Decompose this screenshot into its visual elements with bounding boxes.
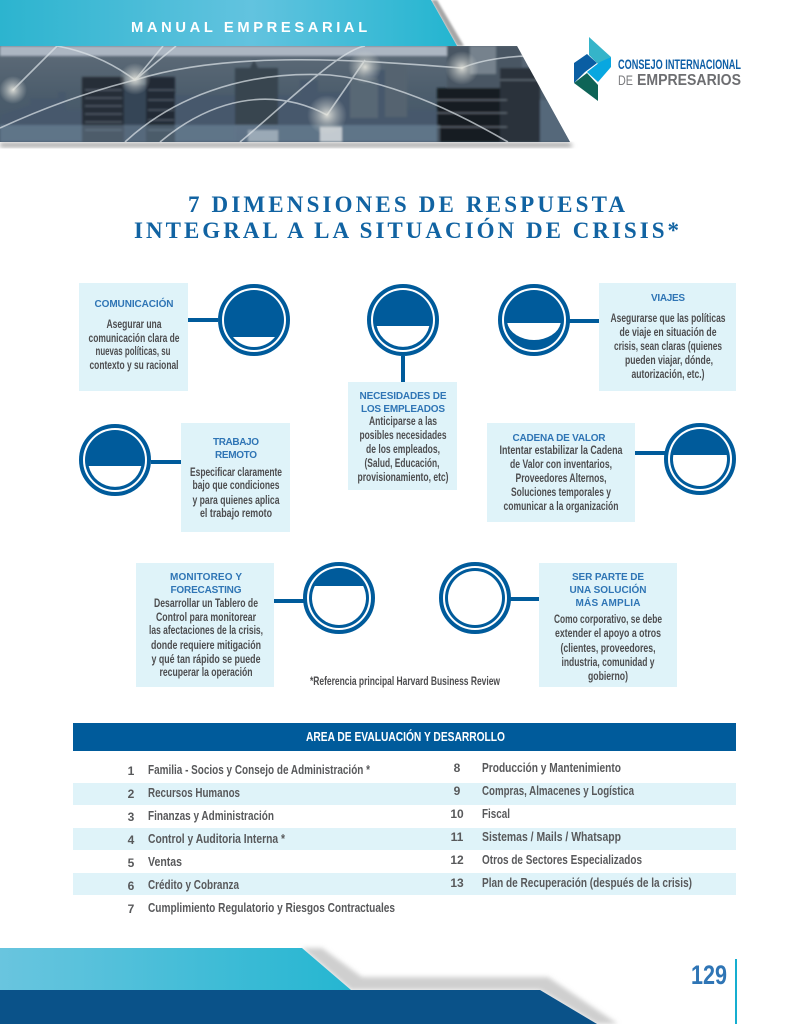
heading: solución: UNA SOLUCIÓN (570, 583, 646, 596)
heading: viajes: VIAJES (651, 293, 685, 304)
text: cadena de valor: Proveedores Alternos, (516, 473, 606, 485)
list: left column: 7 (128, 902, 135, 916)
text: solución: gobierno) (588, 671, 628, 683)
heading: trabajo remoto: TRABAJO (213, 437, 259, 448)
panel: necesidades de los empleados (348, 286, 457, 490)
panel: viajes (500, 283, 736, 391)
text: trabajo remoto (190, 467, 282, 520)
gauge: cadena de valor (666, 425, 734, 493)
list: left column: 2 (128, 787, 135, 801)
list: right column: 13 (450, 876, 464, 890)
gauge: trabajo remoto (81, 426, 149, 494)
list: left column: 4 (128, 833, 135, 847)
heading: trabajo remoto: REMOTO (215, 450, 257, 461)
text: necesidades: Anticiparse a las (369, 416, 437, 428)
logo text: EMPRESARIOS (637, 72, 741, 89)
panel: ser parte de una solución más amplia (441, 563, 677, 687)
text: necesidades: posibles necesidades (360, 430, 446, 442)
title: INTEGRAL A LA SITUACIÓN DE CRISIS* (134, 217, 679, 243)
heading: monitoreo: FORECASTING (170, 585, 242, 596)
text: monitoreo: Desarrollar un Tablero de (154, 598, 258, 610)
table header (73, 723, 736, 751)
text: trabajo remoto: bajo que condiciones (192, 480, 280, 492)
text: viajes: de viaje en situación de (620, 327, 716, 339)
text: necesidades (358, 416, 449, 484)
text: monitoreo: donde requiere mitigación (151, 640, 261, 652)
logo text: DE (618, 73, 633, 88)
city photo strip (0, 46, 580, 142)
gauge: comunicación (220, 286, 288, 354)
cyan header tab (0, 0, 457, 46)
text: comunicación: comunicación clara de (88, 333, 180, 345)
heading: necesidades: LOS EMPLEADOS (361, 404, 445, 415)
text: viajes: crisis, sean claras (quienes (614, 341, 722, 353)
table header: AREA DE EVALUACIÓN Y DESARROLLO (306, 729, 505, 744)
header label: MANUAL EMPRESARIAL (131, 20, 367, 36)
list: right column: 10 (450, 807, 464, 821)
text: solución: (clientes, proveedores, (560, 643, 656, 655)
text: cadena de valor: comunicar a la organización (504, 501, 618, 513)
text: monitoreo: Control para monitorear (156, 612, 256, 624)
text: necesidades: (Salud, Educación, (364, 458, 440, 470)
footer cyan band (0, 948, 351, 990)
panel: monitoreo y forecasting (136, 563, 373, 687)
list: left column: 3 (128, 810, 135, 824)
heading: necesidades: NECESIDADES DE (360, 391, 447, 402)
text: cadena de valor: Intentar estabilizar la Cadena (500, 445, 623, 457)
gauge: solución (441, 564, 509, 632)
text: solución: industria, comunidad y (562, 657, 655, 669)
footer navy band (0, 990, 597, 1024)
list: left column (128, 762, 395, 916)
list: left column: 1 (128, 764, 135, 778)
gauge: monitoreo (305, 564, 373, 632)
header banner (0, 0, 580, 147)
text: solución (554, 614, 662, 683)
text: monitoreo: las afectaciones de la crisis, (149, 625, 263, 637)
text: comunicación: contexto y su racional (90, 360, 178, 372)
heading: comunicación: COMUNICACIÓN (94, 297, 174, 310)
text: cadena de valor: Soluciones temporales y (511, 487, 611, 499)
table: area de evaluación y desarrollo (73, 723, 736, 916)
footer band (0, 948, 618, 1024)
list: left column: Ventas (148, 854, 182, 869)
text: trabajo remoto: el trabajo remoto (200, 508, 272, 520)
list: left column: 6 (128, 879, 135, 893)
list: left column: Familia - Socios y Consejo de Administración * (148, 762, 371, 777)
logo text (618, 57, 741, 89)
gauge: viajes (500, 286, 568, 354)
page number (691, 959, 737, 1024)
panel: cadena de valor (487, 423, 734, 522)
heading: monitoreo: MONITOREO Y (170, 572, 242, 583)
text: cadena de valor (500, 445, 623, 513)
list: right column (450, 760, 692, 890)
text: solución: Como corporativo, se debe (554, 614, 662, 626)
list: right column: 12 (450, 853, 464, 867)
list: right column: Producción y Mantenimiento (482, 760, 621, 775)
text: viajes: pueden viajar, dónde, (625, 355, 713, 367)
list: left column: Finanzas y Administración (148, 808, 274, 823)
logo mark (574, 37, 611, 101)
text: monitoreo (149, 598, 263, 679)
list: right column: Sistemas / Mails / Whatsapp (482, 829, 621, 844)
text: monitoreo: y qué tan rápido se puede (152, 654, 260, 666)
heading: solución: MÁS AMPLIA (576, 596, 640, 609)
list: right column: 11 (451, 830, 464, 844)
heading: solución (570, 572, 646, 609)
list: right column: Plan de Recuperación (después de la crisis) (482, 875, 692, 890)
list: left column: 5 (128, 856, 135, 870)
text: trabajo remoto: y para quienes aplica (192, 495, 280, 507)
panel: trabajo remoto (81, 423, 290, 532)
text: comunicación (88, 319, 180, 372)
list: right column: Otros de Sectores Especializados (482, 852, 642, 867)
text: cadena de valor: de Valor con inventarios, (510, 459, 612, 471)
text: comunicación: nuevas políticas, su (96, 346, 170, 358)
heading: solución: SER PARTE DE (572, 572, 644, 583)
text: viajes (610, 313, 726, 381)
gauge: necesidades (369, 286, 437, 354)
list: left column: Control y Auditoria Interna * (148, 831, 286, 846)
logo (574, 37, 741, 101)
title: 7 DIMENSIONES DE RESPUESTA (188, 192, 625, 217)
panel: comunicación (79, 283, 288, 391)
title (134, 192, 679, 243)
list: right column: Compras, Almacenes y Logística (482, 783, 635, 798)
text: necesidades: provisionamiento, etc) (358, 472, 449, 484)
heading: monitoreo (170, 572, 242, 596)
list: right column: 8 (454, 761, 461, 775)
text: solución: extender el apoyo a otros (555, 628, 661, 640)
text: comunicación: Asegurar una (106, 319, 162, 331)
text: trabajo remoto: Especificar claramente (190, 467, 282, 479)
heading: cadena de valor: CADENA DE VALOR (512, 433, 606, 444)
heading: necesidades (360, 391, 447, 415)
list: left column: Cumplimiento Regulatorio y Riesgos Contractuales (148, 900, 395, 915)
list: left column: Crédito y Cobranza (148, 877, 240, 892)
heading: trabajo remoto (213, 437, 259, 461)
text: necesidades: de los empleados, (366, 444, 440, 456)
list: right column: 9 (454, 784, 461, 798)
reference note: *Referencia principal Harvard Business Review (310, 676, 500, 688)
text: monitoreo: recuperar la operación (160, 667, 252, 679)
list: right column: Fiscal (482, 806, 510, 821)
text: viajes: autorización, etc.) (632, 369, 705, 381)
page number: 129 (691, 960, 727, 990)
list: left column: Recursos Humanos (148, 785, 240, 800)
text: viajes: Asegurarse que las políticas (610, 313, 726, 325)
